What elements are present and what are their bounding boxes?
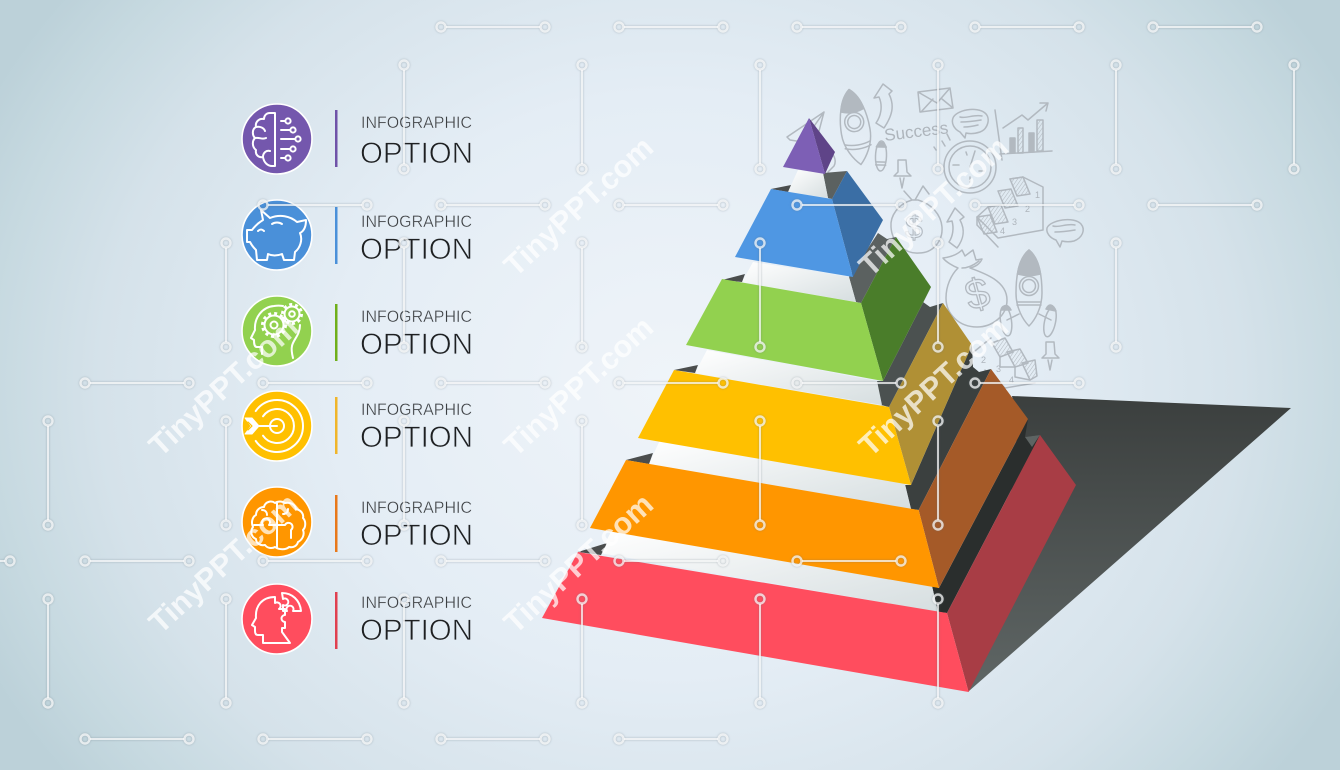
doodle: steps lower: [970, 338, 1037, 388]
tier 4 yellow back and gap: [674, 287, 943, 407]
divider bar: [335, 495, 338, 552]
drop shadow of pyramid: [969, 396, 1291, 691]
tier 6 red back and gap: [578, 419, 1040, 613]
watermark: top right: TinyPPT.com: [852, 130, 1015, 283]
divider bar: [335, 304, 338, 361]
doodle: success word: Success: [883, 118, 949, 145]
doodle: paper plane: [787, 112, 835, 172]
doodles behind pyramid: [787, 84, 1083, 388]
divider bar: [335, 592, 338, 649]
doodle: curved arrow mid: [947, 208, 964, 248]
doodle: push pin lower: [1042, 342, 1059, 370]
doodle: steps top: [977, 177, 1043, 247]
divider bar: [335, 207, 338, 264]
doodle: pod top: [875, 141, 887, 171]
label: OPTION: [360, 233, 473, 266]
doodle: money bag rear: [891, 186, 942, 253]
doodle: steps top: 3: [1012, 217, 1017, 227]
label: OPTION: [360, 421, 473, 454]
label: [360, 499, 473, 552]
icon: puzzle head: [242, 584, 312, 654]
icon: target with arrow: [242, 391, 312, 461]
label: OPTION: [360, 614, 473, 647]
doodle: steps top: 2: [1025, 204, 1030, 214]
label: OPTION: [360, 137, 473, 170]
doodle: clock: [934, 134, 996, 193]
label: [360, 308, 473, 361]
option 5: [242, 487, 473, 557]
label: INFOGRAPHIC: [361, 499, 472, 517]
option 4: [242, 391, 473, 461]
watermark: top centre: TinyPPT.com: [497, 130, 660, 283]
label: OPTION: [360, 519, 473, 552]
label: INFOGRAPHIC: [361, 594, 472, 612]
doodle: rocket top: [835, 87, 875, 167]
option 1: [242, 104, 473, 174]
divider bar: [335, 110, 338, 167]
doodle: steps top: 4: [1000, 226, 1005, 236]
doodle: rocket lower: [1007, 250, 1051, 326]
tier 4 yellow: [638, 303, 972, 485]
icon: head with gears: [242, 296, 312, 366]
doodle: pods lower: [998, 305, 1058, 338]
tier 3 green: [686, 237, 931, 381]
option 3: [242, 296, 473, 366]
tier 2 blue back and gap: [771, 170, 847, 199]
watermark: lower centre: TinyPPT.com: [497, 487, 660, 640]
doodle: envelope: [918, 88, 953, 112]
tier 5 orange: [590, 369, 1028, 588]
label: [360, 213, 473, 266]
tier 1 purple: [783, 118, 835, 174]
icon: puzzle brain: [242, 487, 312, 557]
watermark: middle left: TinyPPT.com: [142, 310, 305, 463]
tier 2 blue: [735, 171, 883, 277]
icon: piggy bank: [242, 200, 312, 270]
label: INFOGRAPHIC: [361, 114, 472, 132]
doodle: steps lower: 2: [981, 355, 986, 365]
doodle: money bag front: $: [960, 268, 995, 319]
label: [360, 594, 473, 647]
watermarks: [142, 130, 1015, 640]
tier 5 orange back and gap: [626, 345, 991, 510]
doodle: steps lower: 3: [996, 364, 1001, 374]
label: [360, 114, 473, 170]
option 6: [242, 584, 473, 654]
doodle: money bag front: [943, 250, 1007, 327]
watermark: middle centre: TinyPPT.com: [497, 310, 660, 463]
doodle: steps lower: 4: [1009, 375, 1014, 385]
option list: [242, 104, 473, 654]
tier 3 green back and gap: [722, 233, 896, 303]
option 2: [242, 200, 473, 270]
label: [360, 401, 473, 454]
doodle: speech bubble mid: [1047, 220, 1083, 247]
doodle: steps top: 1: [1035, 190, 1040, 200]
doodle: bar chart: [995, 103, 1052, 160]
watermark: lower left: TinyPPT.com: [142, 487, 305, 640]
label: INFOGRAPHIC: [361, 213, 472, 231]
watermark: middle right: TinyPPT.com: [852, 310, 1015, 463]
icon: circuit brain: [242, 104, 312, 174]
divider bar: [335, 397, 338, 454]
doodle: money bag rear: $: [905, 209, 923, 245]
pyramid: [542, 118, 1076, 692]
label: INFOGRAPHIC: [361, 308, 472, 326]
label: INFOGRAPHIC: [361, 401, 472, 419]
doodle: push pin top: [894, 160, 911, 188]
doodle: speech bubble top: [952, 109, 988, 138]
label: OPTION: [360, 328, 473, 361]
tier 6 red: [542, 435, 1076, 692]
doodle: curved arrow top: [874, 84, 892, 128]
